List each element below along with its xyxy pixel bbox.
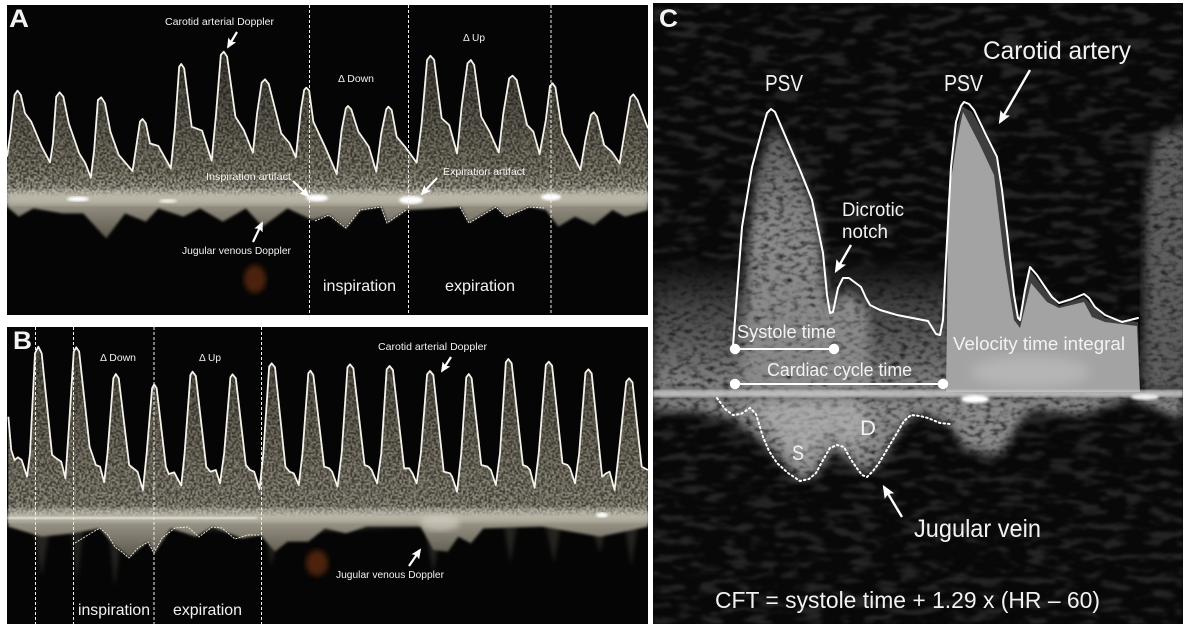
arrow: jugular A xyxy=(253,223,262,242)
label: jugular venous Doppler A: Jugular venous Doppler xyxy=(182,245,291,257)
velocity time integral shaded area xyxy=(946,106,1140,392)
label: PSV first beat: PSV xyxy=(765,70,804,96)
measure: cardiac cycle time xyxy=(730,359,948,389)
arrow: dicrotic notch xyxy=(836,245,851,271)
panel A: respiratory variation Doppler trace xyxy=(7,5,648,315)
label: systole time: Systole time xyxy=(737,321,836,342)
label: S wave: S xyxy=(792,442,804,465)
jugular dashed trace A xyxy=(315,207,544,228)
panel C background xyxy=(653,3,1183,624)
label: inspiration B: inspiration xyxy=(78,602,150,619)
label: carotid arterial Doppler B: Carotid arterial Doppler xyxy=(378,341,487,353)
arrow: carotid artery xyxy=(1000,70,1030,122)
label: inspiration A: inspiration xyxy=(323,278,396,295)
label: jugular venous Doppler B: Jugular venous Doppler xyxy=(336,569,444,581)
formula: capillary flow time: CFT = systole time + 1.29 x (HR – 60) xyxy=(715,587,1100,613)
label: velocity time integral: Velocity time integral xyxy=(953,333,1125,354)
panel B background xyxy=(7,327,648,624)
arrow: carotid A xyxy=(228,32,237,47)
label: carotid arterial Doppler A: Carotid arterial Doppler xyxy=(165,16,274,28)
label: D wave: D xyxy=(860,417,876,440)
label: jugular vein: Jugular vein xyxy=(914,515,1041,543)
panel label B: B xyxy=(13,327,32,355)
arrow: jugular vein xyxy=(884,487,902,517)
label: dicrotic notch: notch xyxy=(842,222,888,243)
label: expiration B: expiration xyxy=(173,602,242,619)
carotid envelope line A xyxy=(7,52,648,178)
label: delta down B: Δ Down xyxy=(100,352,136,364)
jugular dotted trace C xyxy=(717,398,950,481)
label: delta up B: Δ Up xyxy=(199,352,221,364)
baseline and lower jugular signal xyxy=(653,390,1183,481)
panel B arterial speckle fill xyxy=(8,347,648,523)
label: expiration A: expiration xyxy=(445,278,515,295)
respiration divider lines A xyxy=(310,5,551,315)
arrow: carotid B xyxy=(442,357,451,371)
label: carotid artery: Carotid artery xyxy=(983,37,1131,65)
label: inspiration artifact: Inspiration artifact xyxy=(206,171,291,183)
label: expiration artifact: Expiration artifact xyxy=(443,166,525,178)
jugular dashed trace B xyxy=(75,527,260,558)
respiration divider lines B xyxy=(36,327,262,624)
first beat grey spectrum xyxy=(742,125,870,392)
label: cardiac cycle time: Cardiac cycle time xyxy=(767,359,912,380)
carotid envelope outline C xyxy=(733,102,1138,346)
panel B: respiratory variation Doppler trace xyxy=(7,327,648,624)
cardiac cycle bar xyxy=(730,379,948,389)
label: delta up A: Δ Up xyxy=(463,32,485,44)
panel label C: C xyxy=(659,5,678,33)
panel C: annotated Doppler beat measurements xyxy=(653,3,1190,624)
arrow: jugular B xyxy=(409,550,420,566)
label: PSV second beat: PSV xyxy=(944,70,984,96)
measure: systole time xyxy=(730,321,839,354)
arrow: inspiration artifact xyxy=(293,181,308,196)
panel A background xyxy=(7,5,648,315)
panel A arterial speckle fill xyxy=(7,52,648,203)
systole time bar xyxy=(730,344,839,354)
panel A baseline band and jugular venous signal xyxy=(7,190,648,238)
right side grey spectrum xyxy=(1142,125,1190,392)
icon: brown artifact blob xyxy=(244,265,266,293)
panel C background streak texture xyxy=(653,3,1183,624)
label: dicrotic notch: Dicrotic xyxy=(842,200,904,221)
panel B baseline band and jugular venous signal xyxy=(7,509,648,587)
panel label A: A xyxy=(9,5,29,33)
icon: brown artifact blob B xyxy=(306,550,328,576)
arrow: expiration artifact xyxy=(422,178,437,194)
label: delta down A: Δ Down xyxy=(338,73,374,85)
carotid envelope line B xyxy=(8,347,648,492)
mid band grey tissue signal xyxy=(653,262,953,394)
